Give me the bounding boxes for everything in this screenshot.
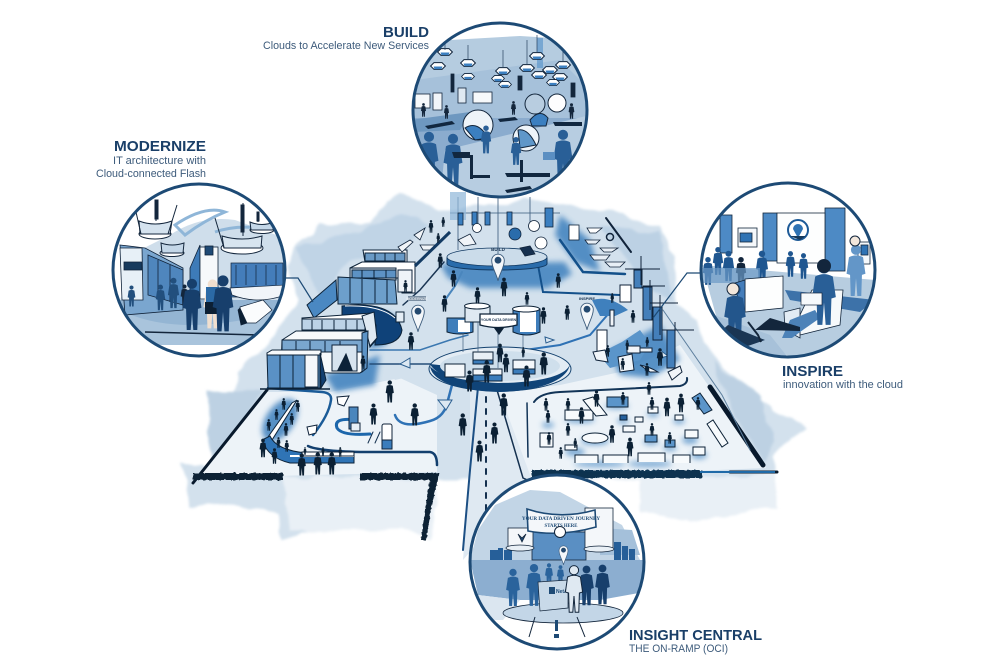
insight pin [559, 546, 568, 565]
location pins [412, 254, 593, 332]
locker module C [302, 312, 377, 347]
people on the map [260, 217, 700, 476]
left wall panels [120, 245, 183, 315]
journey banner [522, 509, 600, 533]
background screens and dividers [415, 74, 575, 110]
heading: insight central: INSIGHT CENTRAL [629, 627, 762, 644]
reception counter [262, 400, 354, 463]
thick brush edges [193, 470, 775, 540]
zone signposts [406, 296, 595, 301]
heading: insight central: THE ON-RAMP (OCI) [629, 643, 728, 655]
zone signposts: INSPIRE [579, 296, 595, 301]
panel: insight central circle [470, 475, 644, 649]
wall columns and screen [720, 208, 870, 271]
locker module E [350, 262, 415, 293]
connector: inspire [653, 273, 701, 318]
central column [190, 245, 218, 299]
seated figures [420, 101, 574, 185]
heading: build: BUILD [383, 24, 429, 41]
build platform [447, 247, 547, 270]
heading: insight central [629, 627, 762, 655]
heading: modernize: Cloud-connected Flash [96, 168, 206, 180]
panel: inspire circle [700, 183, 875, 360]
central platform [429, 347, 571, 392]
hexagon lights [431, 35, 570, 87]
pin: inspire [581, 303, 593, 330]
lounge furniture [542, 403, 707, 467]
panel: build circle [410, 23, 590, 200]
modernize zone lockers [260, 250, 415, 389]
floor panels [196, 330, 766, 560]
modernize kiosks [307, 396, 392, 449]
blue paint shadows [255, 215, 680, 448]
logo on wall [788, 220, 808, 240]
central sign [480, 314, 517, 335]
build zone columns and chairs [398, 192, 625, 270]
pendant lights [136, 200, 274, 256]
journey banner: STARTS HERE [545, 524, 577, 529]
curved walkway [342, 305, 404, 345]
heading: modernize: MODERNIZE [114, 138, 206, 155]
locker module F [363, 250, 407, 262]
background washes [180, 193, 807, 540]
road lines and walkways [193, 218, 777, 550]
floor and background people [128, 278, 188, 310]
netapp podium [538, 580, 568, 612]
zone signposts: MODERNIZE [406, 297, 428, 301]
build platform: BUILD [491, 247, 506, 252]
foreground people [720, 236, 865, 347]
netapp podium: NetApp [556, 589, 574, 595]
egg chairs [463, 94, 566, 151]
connector: modernize [285, 278, 313, 302]
skyline kiosks [490, 542, 635, 560]
panel: modernize circle [113, 184, 290, 356]
locker module D [307, 277, 397, 318]
heading: modernize: IT architecture with [113, 155, 206, 167]
watercolor map illustration [180, 192, 807, 560]
central cylinders [445, 303, 540, 381]
inspire zone columns [592, 256, 694, 380]
foreground people [183, 275, 233, 331]
pin: build [492, 254, 504, 280]
locker module A [260, 350, 330, 389]
heading: inspire [782, 363, 903, 391]
heading: build: Clouds to Accelerate New Services [263, 40, 429, 52]
heading: modernize [96, 138, 206, 180]
heading: inspire: innovation with the cloud [783, 379, 903, 391]
mid-ground crowd [703, 247, 808, 285]
right room [230, 263, 285, 325]
locker module B [281, 331, 368, 373]
journey banner: YOUR DATA DRIVEN JOURNEY [522, 516, 600, 522]
lounge seating [540, 393, 728, 463]
group of people [506, 563, 610, 606]
heading: inspire: INSPIRE [782, 363, 843, 380]
pavilion cylinders [506, 508, 614, 560]
lounge rugs and tables [425, 117, 582, 193]
arrow markers [400, 337, 668, 410]
landing pad and road [502, 602, 624, 645]
pin: modernize [412, 305, 424, 332]
armchairs [735, 276, 843, 338]
central sign: YOUR DATA DRIVEN [481, 318, 517, 322]
heading: build [263, 24, 429, 52]
